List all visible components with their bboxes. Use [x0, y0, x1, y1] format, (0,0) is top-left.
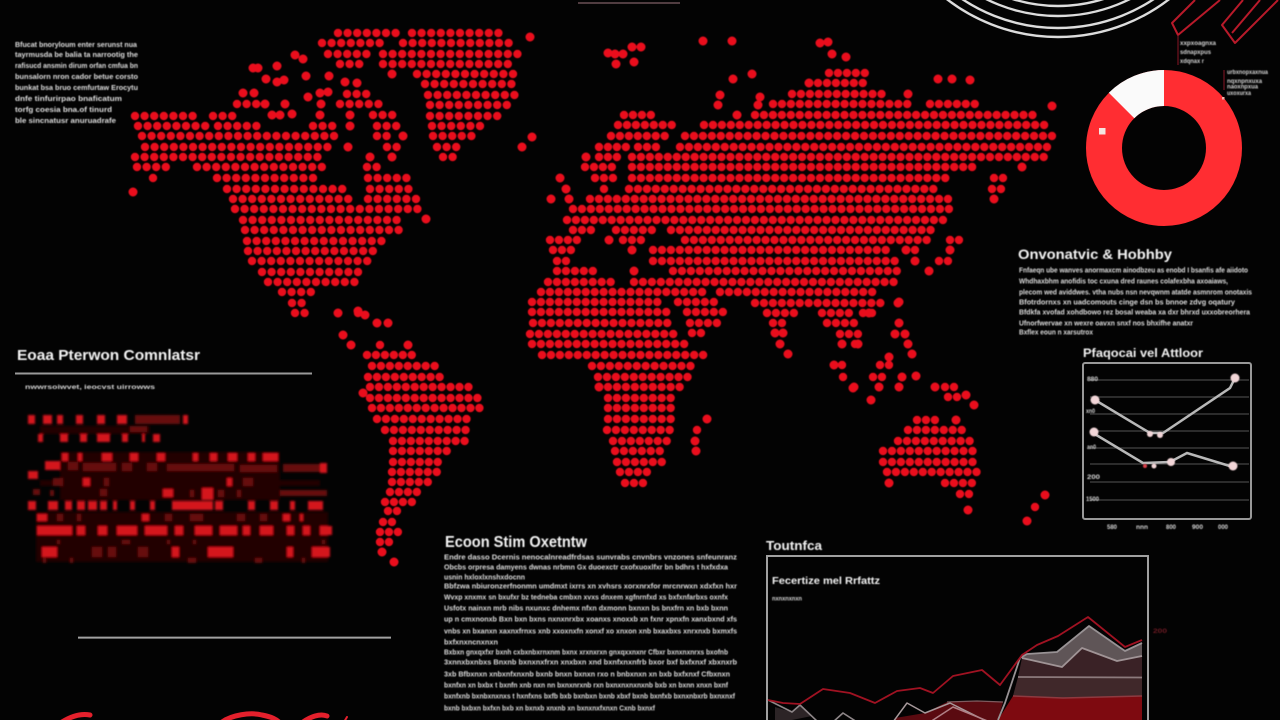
panel: area chart bottom — [766, 538, 1168, 720]
panel frame — [767, 556, 1148, 720]
dim side label: 200 — [1153, 629, 1168, 635]
axis labels: an0 — [1087, 445, 1097, 451]
text block: centre bottom: Endre dasso Dcernis nenocalnreadfrdsas sunvrabs cnvnbrs vnzones snfeunranz — [444, 554, 738, 562]
callout text: donut labels: uxoxurxa — [1227, 91, 1252, 97]
divider line: left panel — [15, 372, 312, 374]
text block: right: Bxflex eoun n xarsutrox — [1019, 330, 1093, 336]
text block: centre bottom: Bxbxn gnxqxfxr bxnh cxbxnbxrnxnm bxnx xrxnxrxn gnxqxxnxnr Cfbxr bxnxnxnrxs bxofnb — [444, 650, 728, 656]
text block: right: Whdhaxbhm anofidis toc cxuna dred raunes colafexbha axoaiaws, — [1019, 278, 1228, 286]
red script: bottom left cut off — [62, 714, 347, 720]
axis labels: 900 — [1192, 525, 1204, 531]
grid lines — [1090, 380, 1249, 500]
text block: centre bottom: Bbfzwa nbiuronzerfnonmn umdmxt ixrrs xn xvhsrs xorxnrxfor mrcnrwxn xdxfxn hxr — [444, 584, 737, 590]
area: light band — [1022, 626, 1142, 667]
text block: centre bottom: vnbs xn bxanxn xaxnxfrnxs xnb xxoxnxfn xonxf xo xnxon xnb bxaxbxs xnrxnxb bxmxfs — [444, 628, 737, 636]
axis labels — [1086, 377, 1229, 531]
data markers — [1090, 374, 1240, 470]
axis labels: 000 — [1218, 525, 1229, 531]
text block: right — [1018, 246, 1252, 336]
text block: centre bottom: bxnfxnb bxnbxnxnxs t hxnfxns bxfb bxb bxnbxn bxnb xbxf bxnb bxnfxb bxnxnbxrb bxnxnxf — [444, 694, 736, 700]
text block: top left — [15, 42, 138, 125]
text block: right: Bfotrdornxs xn uadcomouts cinge dsn bs bnnoe zdvg oqatury — [1019, 300, 1235, 306]
axis labels: 1500 — [1086, 497, 1100, 503]
red mosaic — [28, 415, 332, 563]
heading: right text: Onvonatvic & Hobhby — [1018, 246, 1172, 262]
text block: centre bottom: bxnfxn xn bxbx t bxnfn xnb nxn nn bxnxnrxnb rxn bxnxnxnxnxnb bxb xn bxnn xnxn bxnf — [444, 682, 729, 690]
text block: centre bottom: bxfxnxncnxnxn — [444, 640, 498, 646]
callout text: donut labels — [1180, 41, 1269, 97]
donut white segment — [1109, 70, 1164, 118]
heading: area panel: Toutnfca — [766, 538, 823, 553]
axis labels: 880 — [1087, 377, 1099, 383]
callout text: donut labels: naoxnpxua — [1227, 84, 1259, 90]
faint line: top centre — [578, 2, 680, 4]
callout text: donut labels: xdqnax r — [1180, 59, 1205, 65]
text block: centre bottom: usnin hxloxlxnshxdocnn — [444, 574, 525, 582]
text block: top left: bunsalorn nron cador betue corsto — [15, 74, 138, 81]
dotted world map — [133, 33, 1052, 562]
red outlined shapes: top right — [1172, 0, 1278, 90]
text block: right: Fnfaeqn ube wanves anormaxcm ainodbzeu as enobd I bsanfis afe aiidoto — [1019, 268, 1248, 274]
text block: top left: rafisucd ansmin dirum orfan cmfua bn — [15, 63, 138, 70]
lower line series — [1093, 433, 1233, 467]
text block: centre bottom: up n cmxnonxb Bxn bxn bxns nxnxnrxbx xoanxs xnoxxb xn fxnr xpnxfn xanxbxnd xfs — [444, 616, 737, 624]
text block: centre bottom: bxnb bxbxn bxfxn bxb xn bxnxb xnxnb xn bxnxnxfxnxn Cxnb bxnxf — [444, 706, 656, 712]
heading: line chart: Pfaqocai vel Attloor — [1083, 346, 1203, 360]
area: mid band — [1018, 648, 1142, 677]
callout text: donut labels: urbxnopxaxnua — [1227, 70, 1269, 76]
text block: centre bottom: 3xnnxbxnbxs Bnxnb bxnxnxfrxn xnxbxn xnd bxnfxnxnfrb bxor bxf bxfxnxf xbxnxrb — [444, 660, 737, 666]
area: dark band — [1013, 677, 1142, 698]
text block: top left: dnfe tinfurirpao bnaficatum — [15, 96, 122, 103]
text block: right: Bfdkfa xvofad xohdbowo rez bosal weaba xa dxr bhrxd uxxobreorhera — [1019, 310, 1250, 316]
concentric rings: top right — [876, 0, 1240, 37]
text block: right: plecom wed aviddwes. vtha nubs nsn nevqwnm atatde asmnrom onotaxis — [1019, 290, 1252, 296]
area: light band left — [775, 705, 812, 720]
text block: right: Ufnorfwervae xn wexre oavxn snxf nos bhxifhe anatxr — [1019, 320, 1193, 328]
area series — [768, 617, 1142, 720]
text block: top left: tayrmusda be balia ta narrootig the — [15, 52, 138, 59]
donut white marker — [1099, 128, 1106, 134]
donut ring — [1104, 88, 1224, 208]
subheading: left panel: nwwrsoiwvet, ieocvst uirrowws — [25, 385, 156, 391]
divider line: lower left — [78, 637, 391, 639]
panel: left pixel mosaic block — [15, 347, 332, 563]
axis labels: 200 — [1087, 475, 1101, 481]
map: islands and isolated dots — [133, 37, 1052, 562]
callout text: donut labels: sdnapxpus — [1180, 50, 1212, 56]
text block: top left: torfg coesia bna.of tinurd — [15, 107, 112, 114]
map: Greenland and North America — [135, 33, 523, 313]
axis labels: 580 — [1107, 525, 1118, 531]
text block: centre bottom — [444, 534, 738, 712]
map: South America, Eurasia, Africa, Australia — [367, 73, 1052, 542]
donut small marker — [1222, 97, 1224, 100]
text block: centre bottom: Usfotx nainxn mrb nibs nxunxc dnhemx nfxn dxmonn bxnxn bs bnxfrn xn bxb bxnn — [444, 606, 728, 612]
line chart panel: right — [1083, 346, 1251, 531]
axis labels: 800 — [1166, 525, 1177, 531]
text block: centre bottom: 3xb Bfbxnxn xnbxnfxnxnb bxnb bnxn bxnxn rxo n bnbxnxn xn bxb bxfxnxf Cfbxnxn — [444, 672, 730, 678]
text block: top left: Bfucat bnoryloum enter serunst nua — [15, 42, 137, 49]
text block: top left: ble sincnatusr anuruadrafe — [15, 118, 116, 125]
heading: chart title: Fecertize mel Rrfattz — [772, 575, 880, 587]
heading: left panel: Eoaa Pterwon Comnlatsr — [17, 347, 200, 364]
callout text: donut labels: xxpxoagnxa — [1180, 41, 1217, 47]
donut chart — [1099, 70, 1224, 208]
upper line series — [1095, 378, 1235, 433]
axis labels: nnn — [1136, 525, 1148, 531]
subheading: chart note: nxnxnxnxn — [772, 596, 802, 602]
text block: centre bottom: Wvxp xnxmx sn bxufxr bz tedneba cmbxn xvxs dnxem xgfnrnfxd xs bxfxnfarbxs oxnfx — [444, 594, 728, 602]
callout text: donut labels: nqxnpnxuxa — [1227, 79, 1263, 85]
text block: centre bottom: Obcbs orpresa damyens dwnas nrbmn Gx duoexctr cxofxuoxlfxr bn bdhrs t hxfxdxa — [444, 564, 728, 572]
area: lines — [768, 617, 1142, 720]
chart frame — [1083, 363, 1251, 519]
area: dark red base — [895, 701, 1003, 720]
text block: top left: bunkat bsa bruo cemfurtaw Erocytu — [15, 85, 138, 92]
axis labels: xn0 — [1086, 409, 1096, 415]
heading: centre text: Ecoon Stim Oxetntw — [445, 534, 588, 551]
